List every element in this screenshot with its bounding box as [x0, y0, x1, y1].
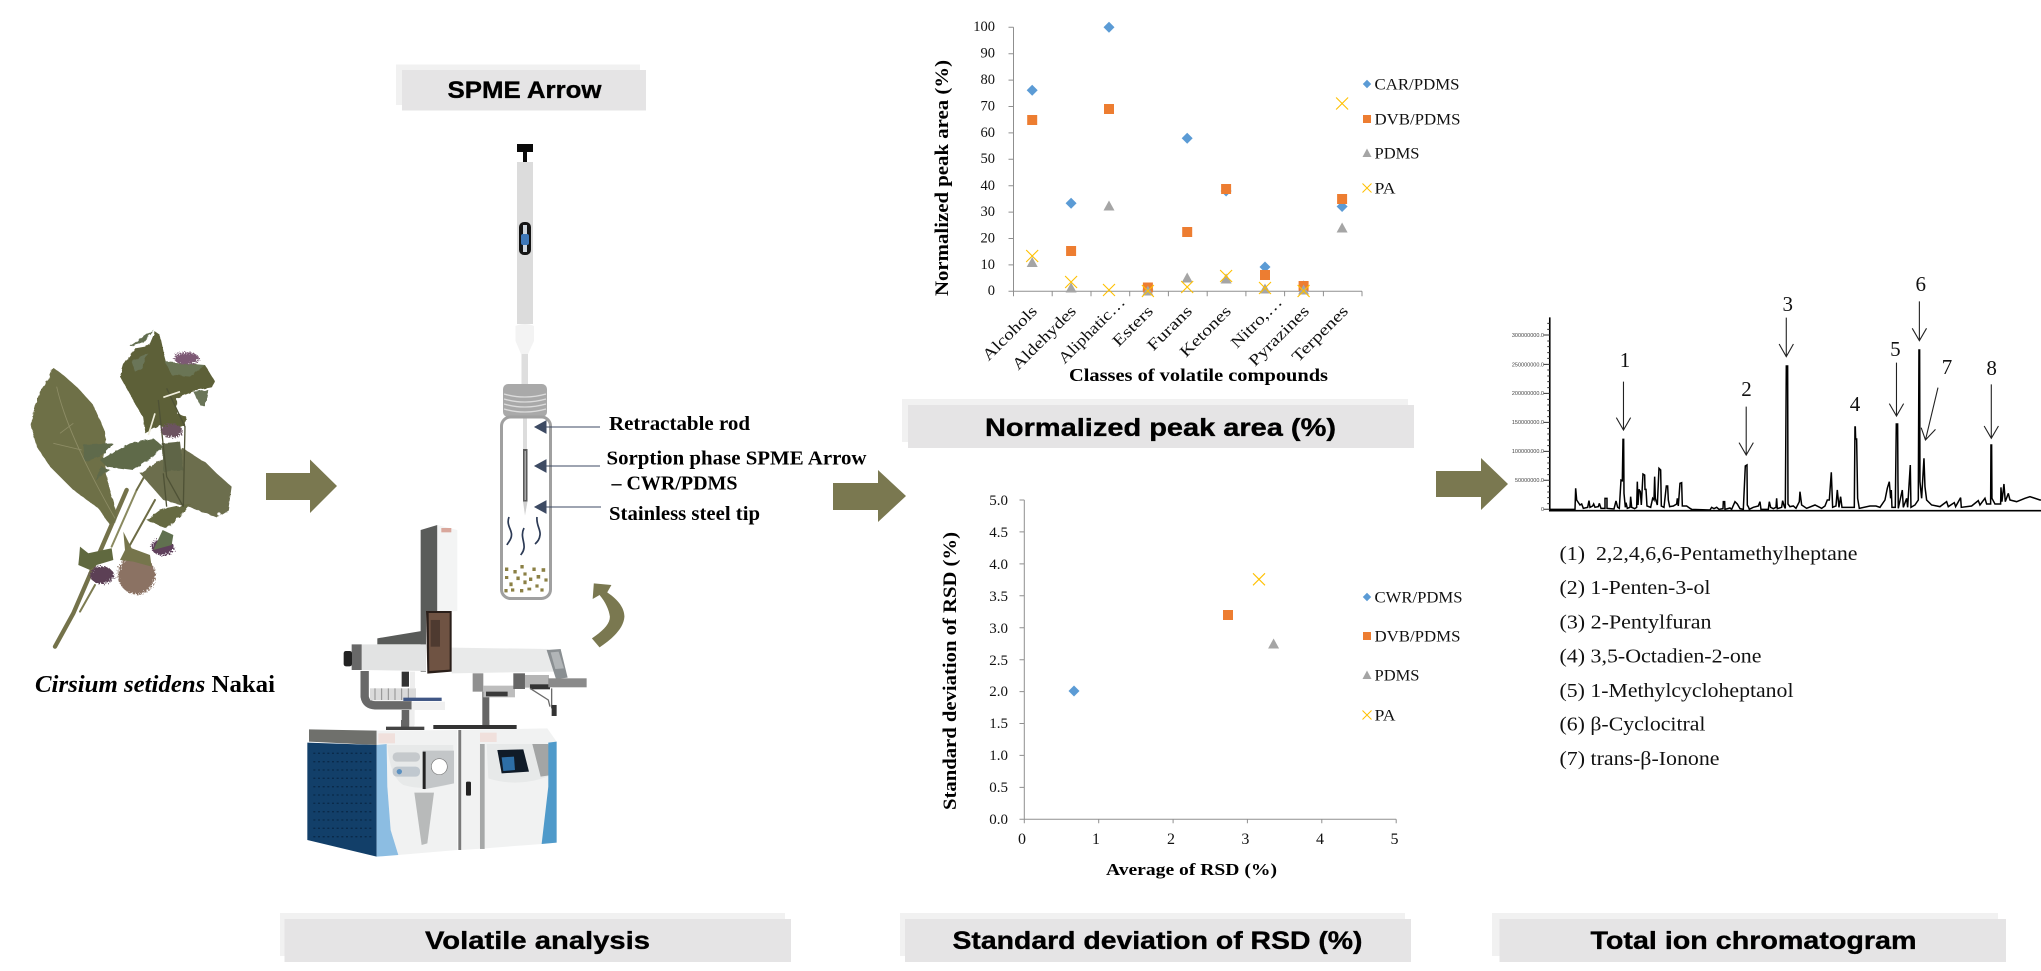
volatile vapour squiggles: [507, 517, 540, 555]
axes: 5.0: [989, 493, 1008, 509]
text block: identified compounds list: [1560, 543, 1858, 770]
icon: SPME Arrow syringe and vial: [502, 144, 867, 598]
y axis: 100: [973, 19, 995, 35]
series: CAR/PDMS: [1027, 22, 1348, 296]
heading: SPME Arrow: SPME Arrow: [448, 77, 602, 104]
axes: 2.0: [989, 684, 1008, 700]
heading: SPME Arrow: [396, 64, 646, 110]
y axis: [973, 19, 1362, 299]
x axis title: Classes of volatile compounds: [1069, 365, 1328, 385]
category labels: Pyrazines: [1246, 303, 1313, 370]
text block: identified compounds list: (4) 3,5-Octadien-2-one: [1560, 646, 1762, 668]
syringe window: [519, 222, 531, 255]
category labels: Furans: [1144, 303, 1196, 354]
y axis: 50: [980, 151, 995, 167]
autosampler tower and rail: [344, 525, 587, 725]
sample particles: [504, 565, 548, 592]
legend: PDMS: [1374, 668, 1420, 684]
axes: 1.5: [989, 716, 1008, 732]
text block: identified compounds list: (1) 2,2,4,6,6-Pentamethylheptane: [1560, 543, 1858, 565]
peak numbers: 4: [1850, 392, 1861, 416]
peak numbers: 7: [1942, 355, 1952, 379]
y axis: 0: [988, 283, 995, 299]
arrow: plant to volatile analysis: [266, 460, 337, 513]
category labels: Nitro,…: [1228, 294, 1286, 352]
icon: GC-MS instrument with autosampler: [307, 525, 587, 857]
y axis labels: 250000000.0: [1512, 362, 1544, 368]
species label: Cirsium setidens Nakai: [35, 672, 275, 698]
y axis labels: [1512, 333, 1544, 513]
chromatogram trace: [1550, 350, 2041, 510]
y axis: 80: [980, 72, 995, 88]
axes: 4.0: [989, 557, 1008, 573]
y axis: 20: [980, 230, 995, 246]
axes: 4: [1316, 831, 1324, 848]
category labels: Ketones: [1177, 303, 1235, 361]
retractable rod and sorption phase: [523, 418, 528, 516]
category labels: [979, 294, 1352, 374]
axes: 3.0: [989, 621, 1008, 637]
peak numbers: 3: [1782, 292, 1793, 316]
y axis: 90: [980, 46, 995, 62]
y axis: 30: [980, 204, 995, 220]
labels: Stainless steel tip: [609, 503, 760, 525]
text block: identified compounds list: (7) trans-β-Ionone: [1560, 748, 1720, 770]
peak numbers: 1: [1620, 348, 1630, 372]
data points: [1068, 573, 1279, 696]
axes: 3.5: [989, 589, 1008, 605]
axes: 0.5: [989, 780, 1008, 796]
syringe tip collar: [516, 324, 534, 354]
legend: PA: [1374, 708, 1396, 724]
axes: 5: [1390, 831, 1398, 848]
heading: Standard deviation of RSD (%): [900, 913, 1411, 962]
y axis labels: 300000000.0: [1512, 333, 1544, 339]
peak numbers: 6: [1916, 272, 1926, 296]
peak numbers: 5: [1890, 337, 1901, 361]
legend: CWR/PDMS: [1374, 590, 1462, 606]
y axis labels: 200000000.0: [1512, 391, 1544, 397]
y axis: 70: [980, 98, 995, 114]
peak numbers: [1620, 272, 1997, 416]
legend: [1362, 76, 1460, 198]
axes: 4.5: [989, 525, 1008, 541]
flower heads: [90, 352, 199, 594]
legend: DVB/PDMS: [1374, 628, 1460, 646]
category labels: Alcohols: [979, 303, 1041, 364]
y axis: 40: [980, 178, 995, 194]
x axis title: Average of RSD (%): [1106, 860, 1277, 879]
series: PDMS: [1027, 200, 1348, 296]
category labels: Aliphatic…: [1055, 294, 1129, 367]
heading: Standard deviation of RSD (%): Standard deviation of RSD (%): [952, 927, 1362, 955]
panel: Cirsium setidens plant photo: [31, 329, 275, 698]
y axis labels: 50000000.0: [1515, 478, 1544, 484]
labels: Retractable rod: [609, 413, 750, 435]
vial cap: [503, 384, 547, 417]
y axis labels: 150000000.0: [1512, 420, 1544, 426]
axes: 1.0: [989, 748, 1008, 764]
peak numbers: 8: [1986, 356, 1997, 380]
axes: [989, 493, 1398, 848]
labels: Sorption phase SPME Arrow: [606, 448, 867, 470]
series: PA: [1026, 98, 1348, 297]
y axis: 10: [980, 257, 995, 273]
y axis labels: 100000000.0: [1512, 449, 1544, 455]
chart: total ion chromatogram: [1512, 272, 2041, 513]
text block: identified compounds list: (2) 1-Penten-3-ol: [1560, 577, 1711, 599]
heading: Normalized peak area (%): Normalized peak area (%): [985, 414, 1336, 442]
category labels: Aldehydes: [1009, 303, 1080, 374]
y axis title: Normalized peak area (%): [932, 60, 953, 296]
axes: 2.5: [989, 653, 1008, 669]
arrow: curved, instrument to fibre: [592, 583, 624, 647]
vial: [502, 417, 550, 598]
axes: 2: [1167, 831, 1175, 848]
legend: CAR/PDMS: [1374, 76, 1460, 94]
chart: standard deviation vs average of RSD: [940, 493, 1462, 879]
heading: Normalized peak area (%): [902, 399, 1414, 448]
syringe plunger: [517, 144, 533, 162]
category labels: Terpenes: [1289, 303, 1352, 366]
y axis labels: 0: [1541, 507, 1544, 513]
heading: Volatile analysis: Volatile analysis: [425, 927, 650, 955]
chromatogram axis: [1544, 301, 2041, 511]
axes: 1: [1092, 831, 1100, 848]
label pointers: [535, 421, 601, 513]
syringe body: [517, 162, 533, 324]
text block: identified compounds list: (3) 2-Pentylfuran: [1560, 612, 1712, 634]
heading: Volatile analysis: [280, 913, 791, 962]
series: DVB/PDMS: [1027, 104, 1347, 292]
arrow: instrument to results: [833, 470, 906, 522]
peak numbers: 2: [1741, 377, 1752, 401]
axes: 0: [1018, 831, 1026, 848]
arrow: results to chromatogram: [1436, 458, 1508, 510]
axes: 0.0: [989, 812, 1008, 828]
labels: [606, 413, 867, 525]
axes: 3: [1241, 831, 1249, 848]
y axis title: Standard deviation of RSD (%): [940, 532, 961, 810]
legend: PA: [1374, 180, 1396, 198]
text block: identified compounds list: (5) 1-Methylcycloheptanol: [1560, 680, 1794, 702]
text block: identified compounds list: (6) β-Cyclocitral: [1560, 714, 1706, 736]
y axis: 60: [980, 125, 995, 141]
labels: – CWR/PDMS: [611, 472, 738, 494]
legend: [1362, 590, 1462, 724]
GC and MS base units: [307, 720, 557, 857]
legend: DVB/PDMS: [1374, 112, 1460, 128]
icon: dried plant specimen: [31, 329, 232, 647]
chart: normalized peak area by compound class: [932, 19, 1460, 385]
heading: Total ion chromatogram: [1492, 913, 2006, 962]
heading: Total ion chromatogram: Total ion chromatogram: [1590, 927, 1916, 955]
category labels: Esters: [1109, 303, 1157, 350]
legend: PDMS: [1374, 146, 1420, 162]
